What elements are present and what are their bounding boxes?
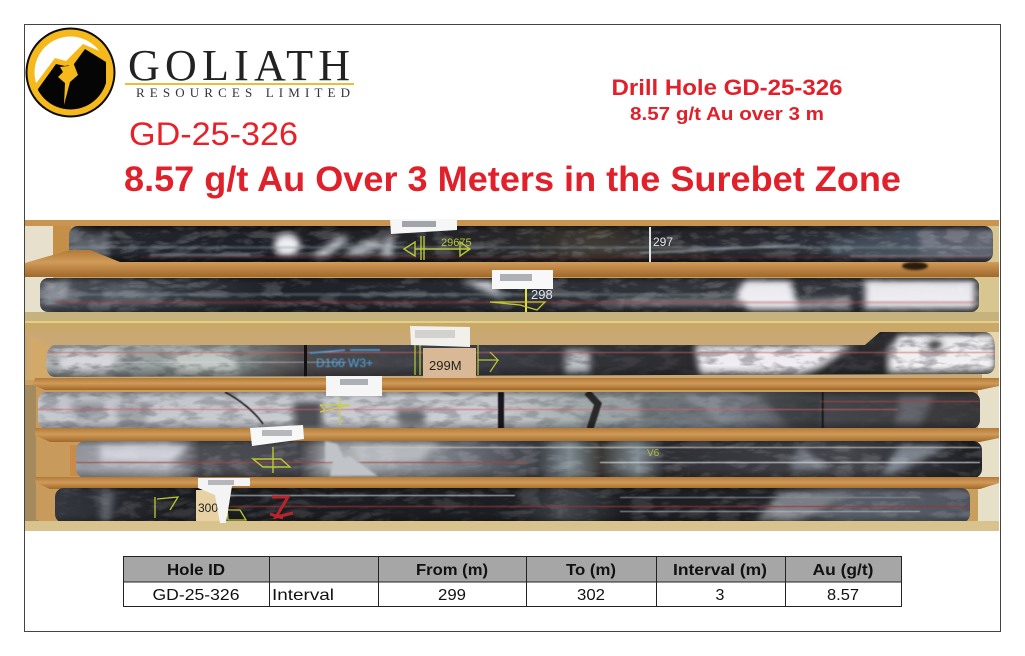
yellow interval marker: [155, 495, 246, 520]
table data row: 8.57: [827, 587, 859, 604]
yellow interval marker: [253, 447, 290, 473]
yellow interval marker: [415, 345, 498, 375]
core row 3: [46, 331, 995, 378]
core row 1: [69, 226, 993, 262]
box backing: [25, 220, 999, 531]
table header: To (m): [566, 562, 616, 579]
depth marker 298: 298: [531, 287, 553, 302]
depth marker 297: [649, 227, 673, 262]
drill hole callout: [612, 75, 842, 124]
tag 299M: [423, 348, 476, 378]
bottom rail: [25, 521, 999, 531]
callout subtitle: 8.57 g/t Au over 3 m: [630, 104, 824, 124]
gold rule: [125, 83, 354, 85]
sample label 4: [326, 376, 382, 396]
tag 300: [196, 490, 224, 523]
red markings: [270, 497, 293, 518]
table header: Interval (m): [673, 562, 767, 579]
depth marker 298: [525, 287, 553, 312]
core row 5: [70, 441, 982, 478]
core row 3: D166 W3+: [316, 356, 373, 370]
results table: [123, 556, 902, 607]
core row 4: [38, 392, 980, 429]
table data row: 3: [716, 587, 725, 604]
tag 299M: 299M: [429, 358, 462, 373]
wordmark: GOLIATH: [128, 41, 350, 90]
core row 6: [55, 488, 970, 523]
table header: From (m): [416, 562, 488, 579]
logo: Goliath Resources: [26, 28, 354, 120]
shelf 1: [25, 250, 999, 277]
table header: [123, 556, 902, 582]
table data row: [152, 587, 859, 604]
wood top rail: [25, 220, 999, 226]
table data row: 302: [577, 587, 605, 604]
main title: 8.57 g/t Au Over 3 Meters in the Surebet Zone: [124, 160, 901, 199]
shelf 3: [33, 378, 999, 390]
shelf 5: [35, 477, 999, 489]
table data row: Interval: [272, 587, 334, 604]
mineralised fragments: [325, 441, 378, 476]
yellow interval marker: [490, 302, 545, 310]
table header: Hole ID: [167, 562, 225, 579]
core row 2: [40, 278, 979, 312]
shelf 1 knot: [902, 262, 928, 270]
yellow interval marker: [320, 398, 350, 425]
shelf 2: [25, 312, 999, 332]
callout title: Drill Hole GD-25-326: [612, 75, 842, 100]
tagline: RESOURCES LIMITED: [136, 85, 350, 100]
sample label 3: [410, 326, 470, 347]
icon: mountain and lightning bolt: [26, 28, 116, 120]
yellow interval marker: [404, 236, 472, 260]
tag 300: 300: [198, 501, 218, 515]
sample label 6: [198, 478, 250, 523]
hole id heading: GD-25-326: [129, 116, 298, 152]
table header: Au (g/t): [812, 562, 874, 579]
label V6: V6: [647, 448, 660, 459]
yellow interval marker: 29675: [441, 237, 472, 249]
sample label 1: [390, 219, 457, 234]
table data row: 299: [438, 587, 466, 604]
sample label 2: [492, 270, 553, 289]
sample label 5: [250, 425, 304, 446]
shelf 4: [35, 428, 999, 442]
core box photo: [25, 219, 999, 531]
depth marker 297: 297: [653, 235, 673, 249]
table data row: GD-25-326: [152, 587, 240, 604]
